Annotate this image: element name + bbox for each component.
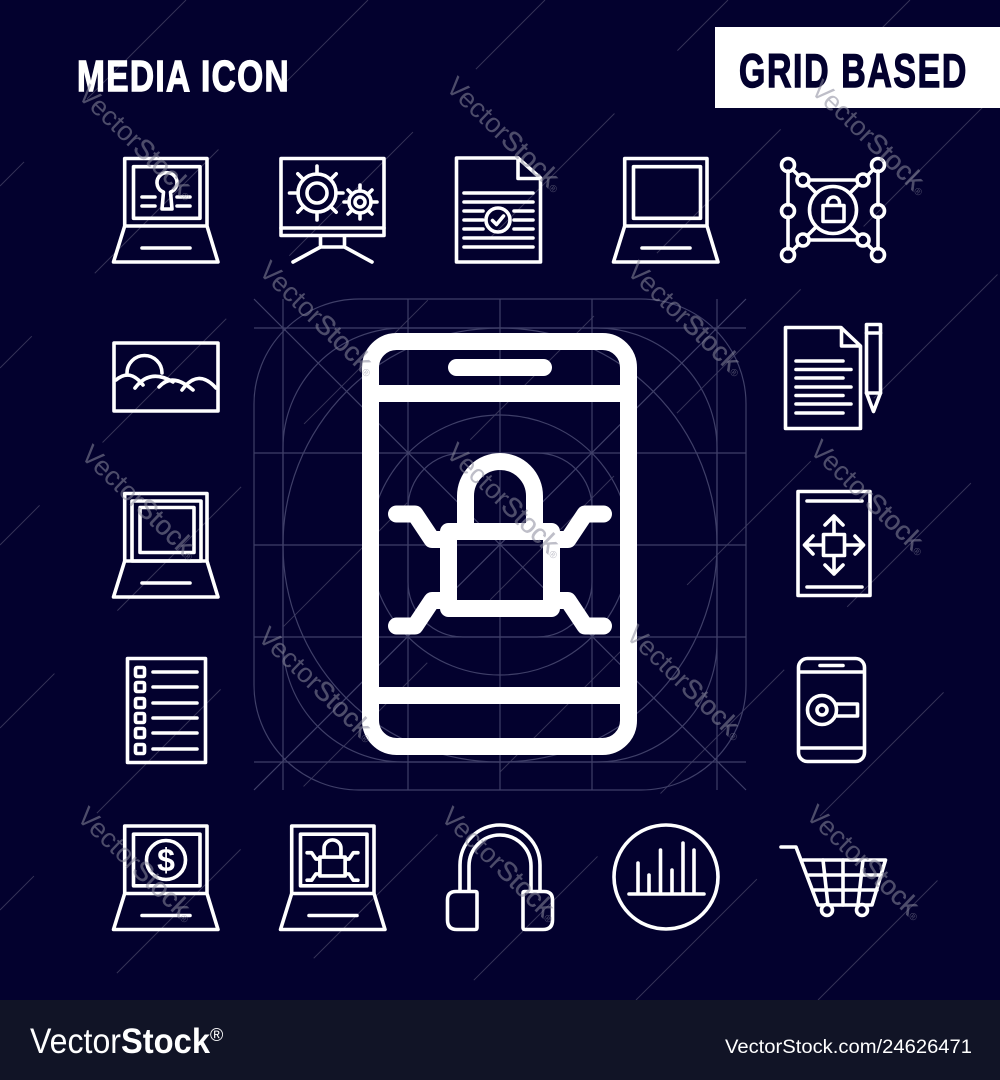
text: VectorStock® [805, 74, 936, 201]
text: VectorStock® [800, 799, 931, 926]
text: VectorStock® [620, 619, 751, 746]
white title tab [715, 27, 1000, 108]
icon: document and pencil [786, 324, 880, 428]
text: VectorStock® [621, 255, 752, 382]
footer logo: ® [210, 1025, 223, 1045]
text: VectorStock® [75, 439, 206, 566]
text: VectorStock® [440, 71, 571, 198]
title: MEDIA ICON [77, 53, 290, 101]
label: grid based: GRID BASED [739, 45, 968, 97]
icon: landscape picture [114, 343, 218, 411]
central icon: smartphone with padlock circuit [370, 342, 629, 746]
construction grid behind the central icon [254, 299, 746, 790]
text: VectorStock® [253, 255, 384, 382]
text: VectorStock® [72, 79, 203, 206]
icon: headphones [448, 825, 552, 930]
icon: laptop with keyhole [114, 158, 218, 262]
text: VectorStock® [71, 801, 202, 928]
icon: monitor with gears [281, 158, 384, 262]
footer logo: Vector [30, 1022, 121, 1061]
footer image id: VectorStock.com/24626471 [725, 1037, 972, 1058]
icon: laptop with dollar [114, 826, 218, 930]
text: VectorStock® [252, 621, 383, 748]
icon: shopping cart [781, 847, 886, 916]
icon: smartphone with key [798, 658, 864, 762]
footer bar [0, 1000, 1000, 1080]
text: VectorStock® [804, 434, 935, 561]
text: VectorStock® [440, 437, 571, 564]
icon: bar chart in circle [614, 825, 718, 929]
dollar sign: $ [157, 842, 175, 878]
icon: laptop with padlock circuit [280, 826, 385, 930]
icon: tablet with move arrows [798, 492, 870, 596]
footer logo: Stock [121, 1022, 210, 1061]
icon: checklist [128, 658, 206, 762]
text: VectorStock® [435, 801, 566, 928]
icon: padlock network [782, 158, 884, 262]
icon: blank laptop [614, 158, 718, 262]
footer logo [30, 1022, 223, 1061]
icon: document with check mark [456, 158, 540, 262]
icon: laptop with nested screens [114, 494, 218, 597]
